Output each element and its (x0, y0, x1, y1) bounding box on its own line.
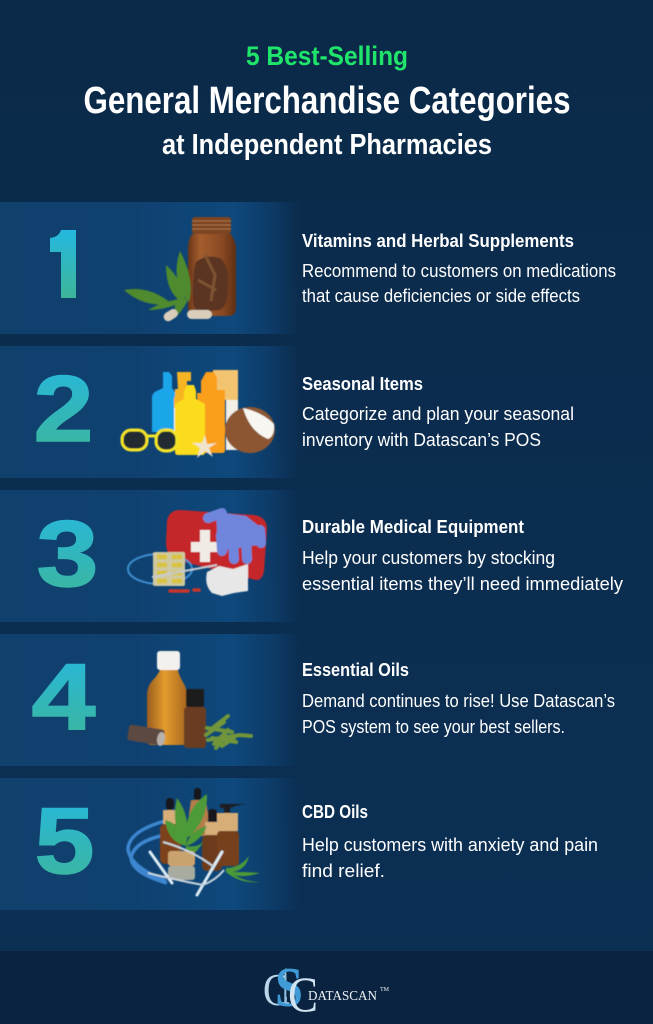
text: CBD oils: find relief. (302, 860, 385, 881)
text: vitamins and herbal supplements (302, 231, 616, 306)
panel: CBD oils (0, 778, 300, 910)
text: durable medical equipment (302, 517, 624, 594)
panel: vitamins and herbal supplements (0, 202, 300, 334)
text: CBD oils (302, 802, 598, 881)
text: durable medical equipment: essential items they’ll need immediately (302, 573, 624, 594)
panel: durable medical equipment (0, 490, 300, 622)
panel: essential oils (0, 634, 300, 766)
icon: vitamin jar with leaves (124, 217, 236, 323)
text: durable medical equipment: Help your customers by stocking (302, 547, 555, 568)
logo: Datascan monogram and wordmark: C (288, 966, 318, 1022)
text: CBD oils: CBD Oils (302, 802, 368, 822)
icon: first aid kit, gloves and stethoscope (128, 510, 267, 596)
text: seasonal items: Categorize and plan your seasonal (302, 403, 574, 424)
number 3: 3 (36, 501, 98, 606)
logo: Datascan monogram and wordmark: DATASCAN (308, 988, 377, 1003)
number 2: 2 (34, 356, 94, 461)
logo: Datascan monogram and wordmark: 1 (279, 956, 291, 1016)
text: vitamins and herbal supplements: that cause deficiencies or side effects (302, 285, 580, 306)
logo: Datascan monogram and wordmark (263, 956, 390, 1022)
logo: Datascan monogram and wordmark: S (275, 957, 303, 1019)
text: seasonal items: inventory with Datascan’s POS (302, 429, 541, 450)
text: vitamins and herbal supplements: Recommend to customers on medications (302, 260, 616, 281)
text: seasonal items: Seasonal Items (302, 374, 423, 394)
text: CBD oils: Help customers with anxiety and pain (302, 834, 598, 855)
text: seasonal items (302, 374, 574, 450)
text: vitamins and herbal supplements: Vitamins and Herbal Supplements (302, 231, 574, 251)
text: essential oils (302, 660, 615, 737)
number 1: 1 (44, 212, 97, 319)
panel: seasonal items (0, 346, 300, 478)
title: 5 Best-Selling (246, 41, 408, 71)
number 1 (50, 230, 76, 298)
title: at Independent Pharmacies (162, 129, 492, 161)
text: durable medical equipment: Durable Medical Equipment (302, 517, 524, 537)
footer bar (0, 951, 653, 1024)
logo: Datascan monogram and wordmark: C (263, 964, 289, 1015)
logo: Datascan monogram and wordmark: TM (380, 987, 390, 993)
text: essential oils: POS system to see your best sellers. (302, 716, 565, 737)
icon: sunscreen bottles, sunglasses and coconut (122, 370, 275, 458)
number 5: 5 (34, 788, 94, 893)
title (84, 41, 570, 161)
icon: CBD bottles, leaves and stethoscope (128, 788, 260, 895)
text: essential oils: Demand continues to rise! Use Datascan’s (302, 690, 615, 711)
number 4: 4 (32, 644, 96, 749)
text: essential oils: Essential Oils (302, 660, 409, 680)
icon: essential oil bottles and herbs (127, 651, 251, 748)
